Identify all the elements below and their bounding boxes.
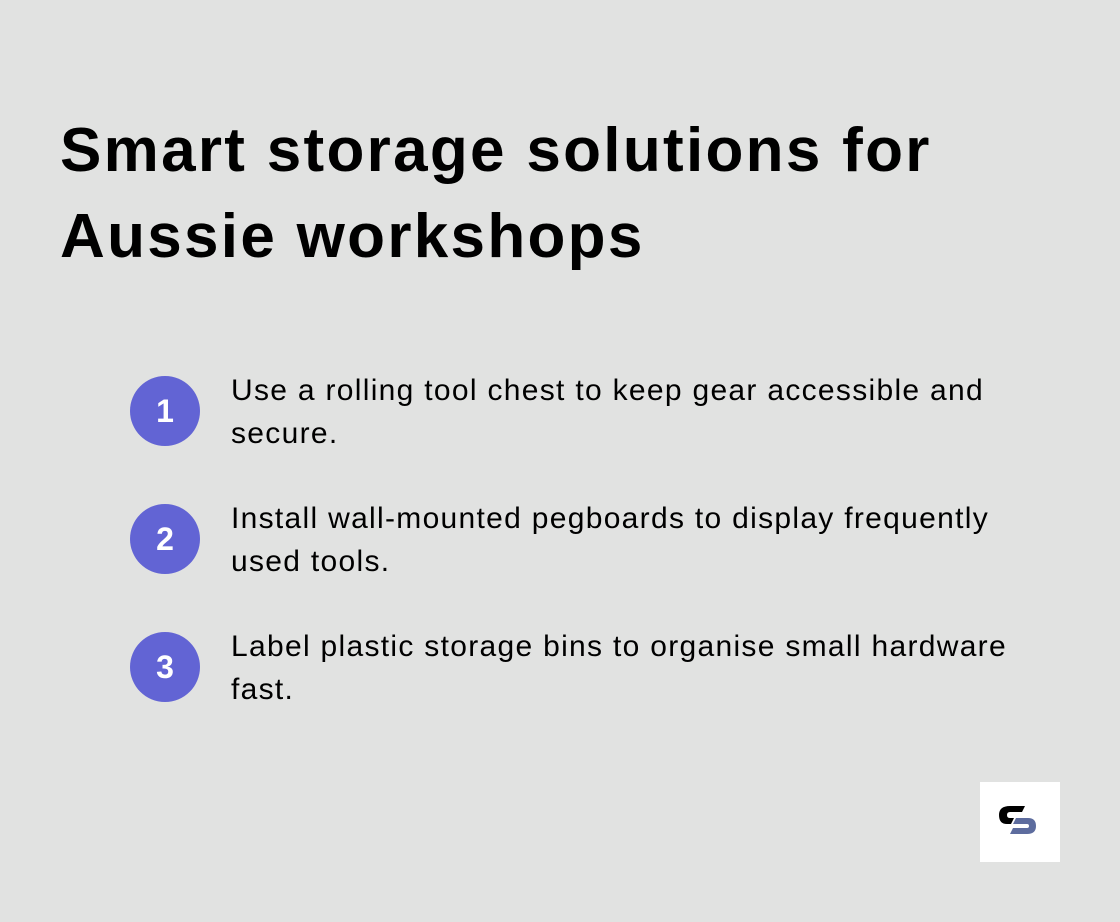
- text 2: used tools.: [231, 545, 390, 578]
- badge 1: [130, 376, 200, 446]
- item 3: [130, 630, 1007, 706]
- badge 3: 3: [156, 649, 174, 685]
- text 3: [231, 630, 1007, 706]
- text 3: Label plastic storage bins to organise small hardware: [231, 630, 1007, 663]
- text 1: [231, 374, 984, 450]
- text 2: Install wall-mounted pegboards to display frequently: [231, 502, 989, 535]
- item 1: [130, 374, 984, 450]
- badge 2: 2: [156, 521, 174, 557]
- text 2: [231, 502, 989, 578]
- text 3: fast.: [231, 673, 294, 706]
- item 2: [130, 502, 989, 578]
- title: Smart storage solutions for: [60, 116, 932, 185]
- title: Aussie workshops: [60, 202, 645, 271]
- badge 3: [130, 632, 200, 702]
- badge 2: [130, 504, 200, 574]
- logo: [980, 782, 1060, 862]
- title: [60, 116, 932, 271]
- text 1: secure.: [231, 417, 338, 450]
- badge 1: 1: [156, 393, 174, 429]
- text 1: Use a rolling tool chest to keep gear accessible and: [231, 374, 984, 407]
